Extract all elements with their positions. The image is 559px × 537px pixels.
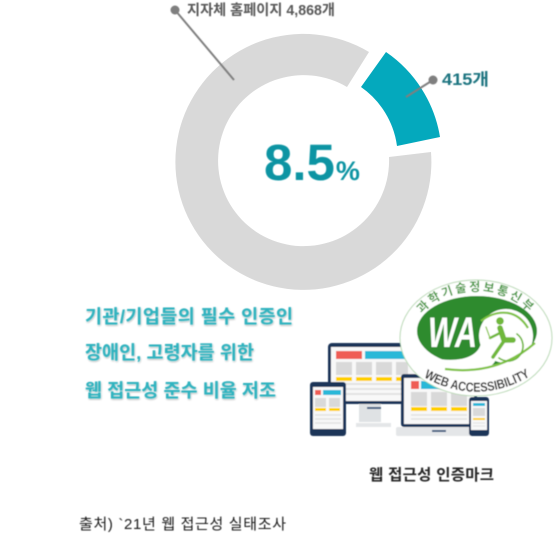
accessibility text: WEB ACCESSIBILITY bbox=[425, 368, 528, 392]
label: homepages count bbox=[170, 2, 335, 80]
label: homepages count: 지자체 홈페이지 4,868개 bbox=[187, 2, 335, 19]
donut chart bbox=[175, 34, 440, 290]
leader line bbox=[406, 80, 433, 97]
donut segment: other homepages bbox=[175, 34, 431, 290]
agency name: 과학기술정보통신부 bbox=[416, 280, 534, 313]
illustration: responsive devices bbox=[310, 343, 489, 436]
white swirl tail bbox=[432, 343, 496, 371]
phone bbox=[469, 397, 489, 436]
center value: 8.5%: 8.5% bbox=[264, 134, 360, 191]
description text: 웹 접근성 준수 비율 저조 bbox=[85, 380, 276, 401]
source note: 출처) `21년 웹 접근성 실태조사 bbox=[79, 516, 286, 533]
leader line bbox=[175, 10, 234, 80]
white circle bbox=[479, 309, 533, 363]
label: 415 bbox=[406, 70, 489, 97]
green ellipse bbox=[417, 296, 537, 366]
caption: certification mark: 웹 접근성 인증마크 bbox=[369, 466, 494, 484]
WA letters: WA bbox=[428, 309, 477, 357]
description text: 기관/기업들의 필수 인증인 bbox=[85, 306, 293, 327]
donut segment: 415 bbox=[361, 52, 440, 146]
laptop bbox=[396, 374, 477, 436]
lime swirl accents bbox=[445, 313, 535, 370]
tablet bbox=[310, 382, 346, 436]
label: 415: 415개 bbox=[442, 70, 489, 89]
badge background bbox=[400, 280, 552, 396]
monitor bbox=[328, 343, 431, 427]
description text bbox=[85, 306, 293, 401]
description text: 장애인, 고령자를 위한 bbox=[85, 342, 254, 363]
icon: wheelchair user bbox=[486, 317, 523, 361]
badge: web accessibility mark bbox=[399, 279, 553, 398]
